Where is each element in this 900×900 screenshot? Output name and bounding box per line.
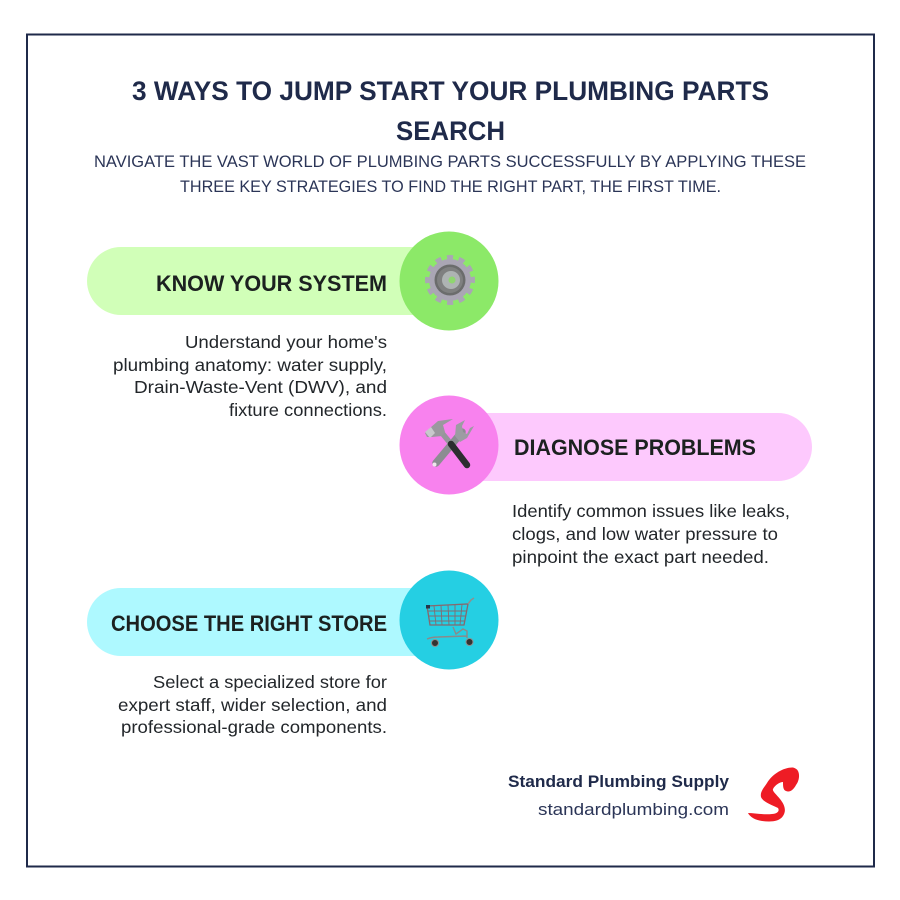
pill: know your system: [87, 247, 440, 315]
text: know your system: Understand your home's: [185, 332, 387, 352]
panel: diagnose problems: [400, 396, 812, 567]
text: know your system: plumbing anatomy: water supply,: [113, 355, 387, 375]
circle: know your system: [400, 232, 498, 330]
title: SEARCH: [396, 116, 505, 146]
subtitle: THREE KEY STRATEGIES TO FIND THE RIGHT PART, THE FIRST TIME.: [180, 177, 721, 196]
icon: gear: [425, 255, 475, 305]
brand url: standardplumbing.com: [538, 800, 729, 819]
text: know your system: fixture connections.: [229, 400, 387, 420]
text: diagnose problems: pinpoint the exact part needed.: [512, 547, 769, 567]
circle: choose the right store: [400, 570, 498, 670]
subtitle: NAVIGATE THE VAST WORLD OF PLUMBING PARTS SUCCESSFULLY BY APPLYING THESE: [94, 152, 806, 171]
heading: know your system: KNOW YOUR SYSTEM: [156, 271, 387, 296]
pill: choose the right store: [87, 588, 440, 656]
logo: red S: [748, 767, 799, 821]
brand name: Standard Plumbing Supply: [508, 773, 730, 791]
text: choose the right store: [118, 672, 387, 737]
pill: diagnose problems: [460, 413, 812, 481]
text: choose the right store: Select a specialized store for: [153, 672, 387, 692]
text: know your system: [113, 332, 387, 420]
brand: standard plumbing supply: [508, 767, 799, 821]
subtitle: [94, 152, 806, 196]
text: know your system: Drain-Waste-Vent (DWV), and: [134, 377, 387, 397]
text: choose the right store: expert staff, wider selection, and: [118, 695, 387, 715]
text: diagnose problems: clogs, and low water pressure to: [512, 524, 778, 544]
text: diagnose problems: [512, 501, 790, 567]
icon: shopping cart: [426, 598, 474, 646]
circle: diagnose problems: [400, 396, 498, 494]
panel: choose the right store: [87, 570, 498, 737]
heading: choose the right store: CHOOSE THE RIGHT STORE: [111, 611, 387, 636]
icon: hammer and wrench: [425, 419, 474, 466]
panel: know your system: [87, 232, 499, 420]
text: choose the right store: professional-grade components.: [121, 717, 387, 737]
title: [132, 76, 769, 146]
heading: diagnose problems: DIAGNOSE PROBLEMS: [514, 435, 756, 460]
text: diagnose problems: Identify common issues like leaks,: [512, 501, 790, 521]
title: 3 WAYS TO JUMP START YOUR PLUMBING PARTS: [132, 76, 769, 106]
